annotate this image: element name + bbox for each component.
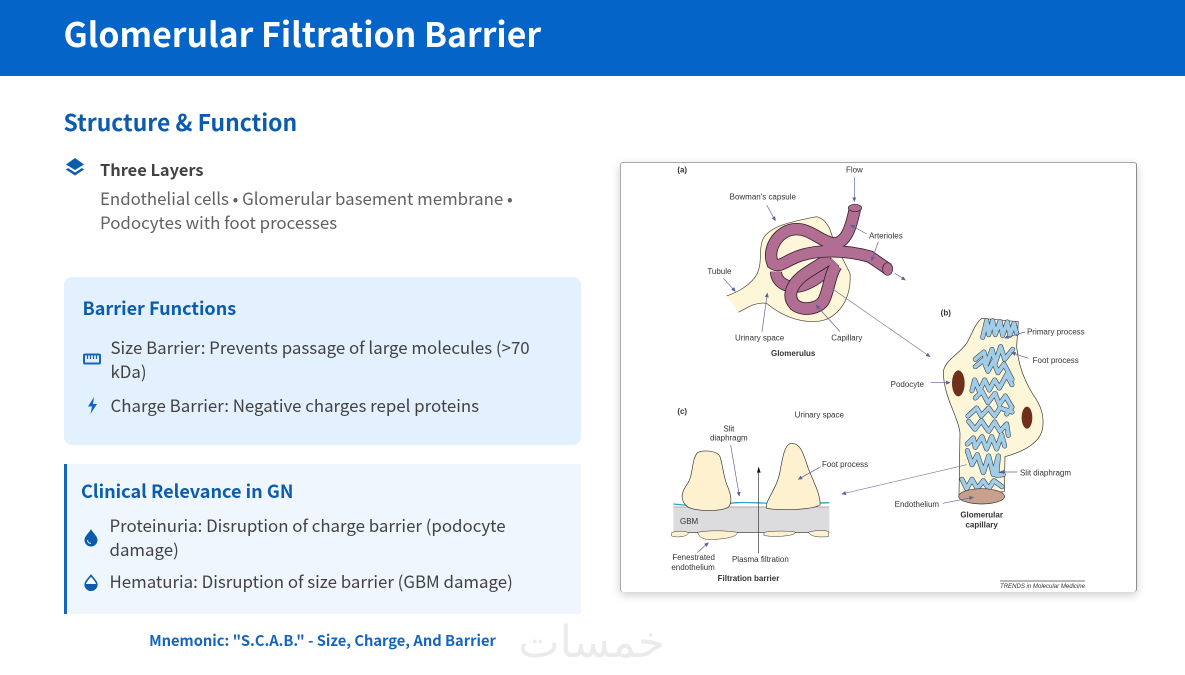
proteinuria text: Proteinuria: Disruption of charge barrier (podocyte [110, 512, 506, 537]
clinical heading: Clinical Relevance in GN [81, 478, 293, 504]
foot processes [682, 451, 731, 511]
diagram c: filtration barrier: Slit [723, 424, 735, 433]
diagram a: glomerulus: (a) [677, 166, 687, 175]
layers heading: Three Layers [100, 157, 204, 181]
diagram c: filtration barrier: diaphragm [710, 433, 748, 442]
diagram b: glomerular capillary: Glomerular [960, 511, 1003, 520]
size barrier text: Size Barrier: Prevents passage of large molecules (>70 [110, 334, 530, 359]
diagram c: filtration barrier: endothelium [671, 563, 715, 572]
diagram a: glomerulus: Glomerulus [771, 349, 816, 358]
diagram c: filtration barrier: GBM [680, 517, 698, 526]
icon: bolt [88, 397, 97, 414]
diagram c: filtration barrier [671, 407, 868, 583]
slit diaphragm line [673, 502, 829, 505]
panel: three layers [66, 157, 513, 234]
journal credit [1000, 581, 1086, 590]
diagram a: glomerulus: Arterioles [869, 232, 903, 241]
size barrier text [110, 334, 530, 383]
lower loop [776, 262, 835, 287]
foot processes [962, 321, 1017, 489]
diagram c: filtration barrier: Fenestrated [672, 553, 715, 562]
layers description: Endothelial cells • Glomerular basement membrane • [100, 185, 513, 210]
barrier heading: Barrier Functions [82, 295, 236, 321]
diagram a: glomerulus: Flow [846, 166, 863, 175]
endothelium [672, 530, 829, 539]
figure panel [620, 162, 1137, 592]
diagram c: filtration barrier: Plasma filtration [732, 555, 789, 564]
size barrier text: kDa) [110, 358, 147, 383]
watermark: خمسات [518, 617, 665, 668]
diagram a: glomerulus [677, 166, 930, 358]
arterioles [771, 208, 888, 269]
section heading: Structure & Function [64, 104, 297, 138]
hematuria text: Hematuria: Disruption of size barrier (GBM damage) [110, 568, 513, 593]
diagram a: glomerulus: Bowman's capsule [730, 193, 797, 202]
diagram b: glomerular capillary: capillary [965, 521, 998, 530]
capsule [727, 217, 850, 322]
diagram b: glomerular capillary: Primary process [1027, 328, 1085, 337]
panel: clinical relevance [64, 464, 581, 614]
diagram c: filtration barrier: (c) [677, 407, 687, 416]
accent bar [64, 464, 67, 614]
diagram c: filtration barrier: Urinary space [795, 411, 844, 420]
panel: barrier functions [64, 277, 581, 445]
icon: filled drop [84, 529, 98, 546]
charge barrier text: Charge Barrier: Negative charges repel proteins [110, 392, 479, 417]
title: Glomerular Filtration Barrier [64, 8, 541, 57]
podocyte body [943, 318, 1043, 495]
header banner [0, 0, 1185, 76]
icon: half drop [84, 574, 98, 591]
proteinuria text: damage) [110, 536, 179, 561]
capillary loop [791, 258, 837, 309]
layers description: Podocytes with foot processes [100, 209, 337, 234]
diagram a: glomerulus: Capillary [831, 333, 862, 342]
diagram b: glomerular capillary: Podocyte [891, 380, 925, 389]
diagram c: filtration barrier: Filtration barrier [718, 574, 779, 583]
diagram b: glomerular capillary: (b) [941, 308, 951, 317]
diagram b: glomerular capillary: Slit diaphragm [1020, 468, 1071, 477]
icon: ruler [83, 354, 101, 364]
mnemonic: Mnemonic: "S.C.A.B." - Size, Charge, And Barrier [149, 630, 496, 651]
layers description [100, 185, 513, 234]
proteinuria text [110, 512, 506, 561]
diagram c: filtration barrier: Foot process [822, 460, 868, 469]
diagram b: glomerular capillary: Foot process [1033, 356, 1079, 365]
diagram b: glomerular capillary: Endothelium [895, 500, 939, 509]
diagram b: glomerular capillary [842, 308, 1085, 530]
diagram a: glomerulus: Urinary space [735, 333, 785, 342]
diagram a: glomerulus: Tubule [707, 267, 732, 276]
icon: layers [66, 158, 84, 176]
GBM [673, 507, 829, 533]
journal credit: TRENDS in Molecular Medicine [1000, 584, 1086, 590]
